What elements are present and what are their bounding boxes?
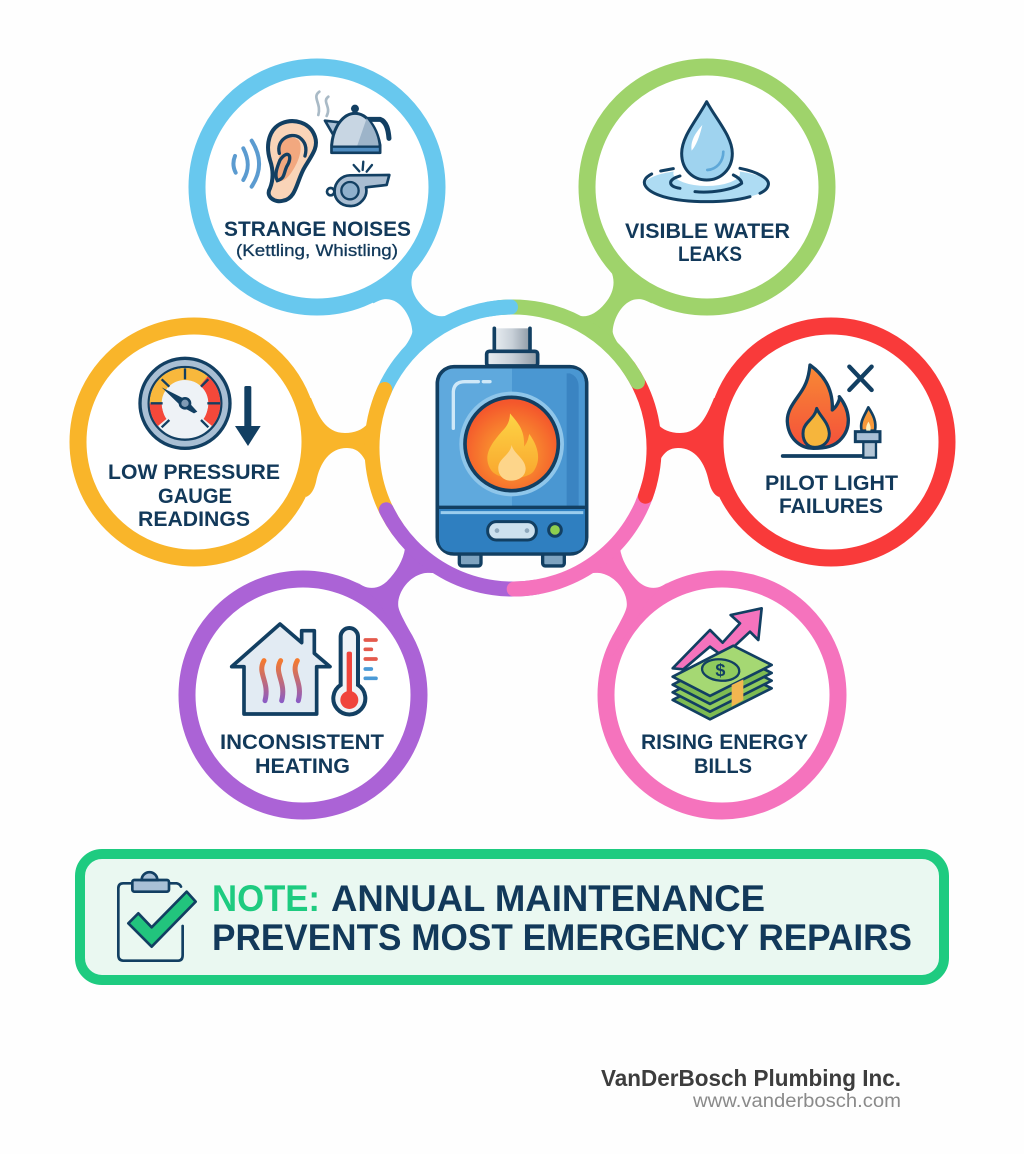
blue circle <box>197 67 437 307</box>
green connector <box>565 260 657 370</box>
label: strange noises: STRANGE NOISES <box>224 218 411 241</box>
pink connector <box>582 548 668 657</box>
icon: money stack and rising arrow <box>673 608 772 719</box>
panel: visible water leaks <box>565 67 827 370</box>
boiler body <box>437 367 587 554</box>
note text <box>212 878 912 958</box>
panel: inconsistent heating <box>187 548 443 811</box>
panel: rising energy bills <box>582 548 838 811</box>
panel: pilot light failures <box>645 326 947 558</box>
icon: clipboard with check <box>118 872 196 961</box>
note text: NOTE: <box>212 878 320 919</box>
callout: note <box>80 854 944 980</box>
note text: ANNUAL MAINTENANCE <box>331 878 765 919</box>
label: pilot light failures: PILOT LIGHT <box>765 472 898 495</box>
purple connector <box>357 548 443 657</box>
icon: flame, pilot burner and cross <box>783 365 880 458</box>
footer: company name and website <box>601 1065 901 1112</box>
icon: house and thermometer <box>232 624 376 714</box>
green circle <box>587 67 827 307</box>
boiler feet <box>459 553 564 566</box>
icon: ear, kettle and whistle <box>233 92 389 206</box>
label: visible water leaks: LEAKS <box>678 243 742 266</box>
label: pilot light failures <box>765 472 898 518</box>
label: low pressure gauge readings: LOW PRESSURE <box>108 461 280 484</box>
label: visible water leaks: VISIBLE WATER <box>625 220 790 243</box>
red circle <box>715 326 947 558</box>
central ring <box>372 307 654 589</box>
label: inconsistent heating: HEATING <box>255 755 350 778</box>
icon: pressure gauge and down arrow <box>140 358 261 448</box>
icon: water drop <box>644 102 769 202</box>
label: low pressure gauge readings <box>108 461 280 531</box>
sublabel: kettling, whistling: (Kettling, Whistling) <box>236 241 398 260</box>
pink circle <box>606 579 838 811</box>
blue connector <box>368 260 460 370</box>
footer: company name and website: www.vanderbosch.com <box>692 1091 901 1112</box>
label: low pressure gauge readings: READINGS <box>138 508 250 531</box>
label: rising energy bills: BILLS <box>694 755 752 778</box>
icon: boiler <box>437 328 587 566</box>
note text: PREVENTS MOST EMERGENCY REPAIRS <box>212 917 912 958</box>
label: visible water leaks <box>625 220 790 266</box>
boiler window <box>459 392 564 496</box>
panel: low pressure gauge readings <box>78 326 380 558</box>
purple circle <box>187 579 419 811</box>
footer: company name and website: VanDerBosch Plumbing Inc. <box>601 1065 901 1091</box>
callout box <box>80 854 944 980</box>
red connector <box>645 398 721 497</box>
label: rising energy bills <box>641 731 808 778</box>
label: pilot light failures: FAILURES <box>779 495 883 518</box>
icon: money stack and rising arrow: $ <box>715 660 725 680</box>
label: inconsistent heating <box>220 731 384 778</box>
boiler button and LED <box>488 522 561 540</box>
label: inconsistent heating: INCONSISTENT <box>220 731 384 754</box>
panel: strange noises <box>197 67 460 370</box>
label: rising energy bills: RISING ENERGY <box>641 731 808 754</box>
orange circle <box>78 326 310 558</box>
label: low pressure gauge readings: GAUGE <box>158 485 232 508</box>
boiler pipe <box>487 328 538 366</box>
orange connector <box>304 398 380 497</box>
